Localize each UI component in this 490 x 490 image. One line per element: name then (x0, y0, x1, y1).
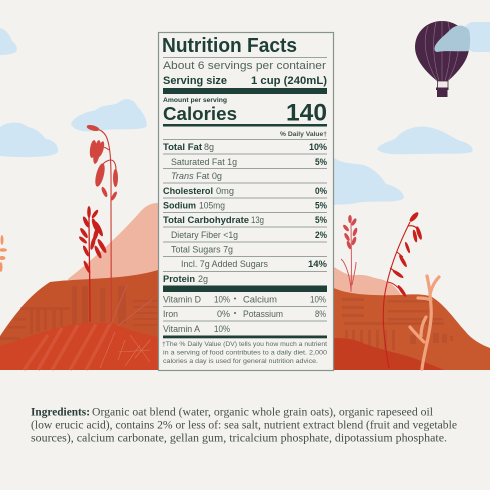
row: vitamin A: 10% (214, 324, 230, 334)
hill: right foreground (334, 338, 444, 370)
cloud: centre left (71, 99, 147, 131)
row: sodium: 5% (315, 200, 327, 210)
plant: orange edge (0, 235, 7, 272)
row: vitamin D and calcium: 10% (214, 294, 230, 304)
row: sodium (163, 200, 327, 210)
footnote divider (163, 336, 327, 338)
row: vitamin A (163, 324, 230, 334)
row: total fat: 10% (309, 142, 327, 152)
ingredients text: Ingredients: (31, 406, 90, 418)
row: total carbohydrate (163, 215, 327, 225)
row: total fat (163, 142, 327, 152)
row: added sugars: Incl. 7g Added Sugars (181, 259, 268, 269)
pink hill: right (334, 267, 402, 296)
thick divider vitamins (163, 286, 327, 292)
plant: peach branch (410, 276, 439, 369)
row: saturated fat: 5% (315, 157, 327, 167)
hill texture: foreground scratches (100, 332, 150, 368)
row: added sugars: 14% (308, 259, 327, 269)
balloon cloud overlay (434, 26, 470, 52)
balloon ropes (438, 81, 448, 88)
hill: left foreground (0, 323, 158, 370)
row: vitamin D and calcium (163, 294, 326, 304)
cloud: lower right (334, 158, 404, 205)
row: dietary fiber: Dietary Fiber <1g (171, 230, 238, 240)
row: cholesterol: 0% (315, 186, 327, 196)
row: iron and potassium: Iron (163, 309, 178, 319)
row: saturated fat (171, 157, 327, 167)
ingredients text (31, 406, 457, 444)
row: iron and potassium: 0% (217, 309, 230, 319)
row: protein (163, 274, 208, 284)
row: vitamin D and calcium: 10% (310, 294, 326, 304)
row: dietary fiber (171, 230, 327, 240)
plant: curved right (383, 211, 423, 368)
hill: right midground (334, 288, 490, 370)
serving size: Serving size (163, 75, 227, 87)
ingredients text: (low erucic acid), contains 2% or less of: sea salt, nutrient extract blend (fruit and vegetable (31, 418, 457, 432)
cloud: upper left (0, 122, 58, 157)
calories: 140 (286, 100, 327, 126)
thick divider (163, 88, 327, 94)
calories: Calories (163, 103, 237, 124)
row: cholesterol: 0mg (216, 186, 234, 196)
hill texture: left (0, 286, 158, 340)
row: cholesterol: Cholesterol (163, 186, 213, 196)
row: total carbohydrate: 5% (315, 215, 327, 225)
plant: small right (341, 215, 358, 292)
hill texture: foreground stripes (24, 324, 110, 370)
servings per container: About 6 servings per container (163, 60, 326, 72)
row: protein: 2g (198, 274, 208, 284)
pink hill: left (68, 203, 158, 280)
hill texture: right (342, 298, 453, 350)
footnote (162, 341, 328, 365)
panel title: Nutrition Facts (162, 35, 297, 57)
row: total sugars: Total Sugars 7g (171, 244, 233, 254)
row: total fat: Total Fat (163, 142, 202, 152)
footnote: †The % Daily Value (DV) tells you how much a nutrient (162, 341, 327, 348)
balloon basket (436, 88, 448, 97)
row: sodium: Sodium (163, 200, 196, 210)
daily value header: % Daily Value† (280, 132, 327, 138)
row: protein: Protein (163, 274, 195, 284)
row: iron and potassium (163, 309, 326, 319)
ingredients text: Organic oat blend (water, organic whole grain oats), organic rapeseed oil (92, 406, 433, 418)
footnote: calories a day is used for general nutrition advice. (163, 358, 318, 365)
row: total carbohydrate: Total Carbohydrate (163, 215, 249, 225)
row: total carbohydrate: 13g (251, 215, 264, 225)
serving size (163, 75, 327, 87)
row: iron and potassium: 8% (315, 309, 326, 319)
hot air balloon (415, 21, 470, 97)
cloud: top left (0, 28, 17, 55)
plant: tall left (86, 124, 118, 323)
row: dietary fiber: 2% (315, 230, 327, 240)
plant: pink grass blades (111, 285, 152, 326)
cloud: mid right (377, 126, 473, 154)
row: vitamin D and calcium: Vitamin D (163, 294, 201, 304)
balloon envelope (415, 21, 469, 81)
balloon seams (425, 21, 459, 81)
nutrition facts panel (158, 32, 334, 370)
serving size: 1 cup (240mL) (251, 75, 327, 87)
row: vitamin D and calcium: Calcium (243, 294, 277, 304)
hill: left midground (0, 270, 158, 370)
cloud: top right (463, 22, 490, 52)
row: vitamin A: Vitamin A (163, 324, 200, 334)
calories (163, 100, 327, 126)
panel background (158, 32, 334, 370)
amount per serving: Amount per serving (163, 98, 227, 104)
row: added sugars (181, 259, 327, 269)
row: sodium: 105mg (199, 200, 225, 210)
row: total fat: 8g (204, 142, 214, 152)
row: cholesterol (163, 186, 327, 196)
plant: short left (78, 206, 108, 322)
row: trans fat: Trans Fat 0g (171, 171, 222, 181)
ingredients text: sources), calcium carbonate, gellan gum, tricalcium phosphate, dipotassium phosphate. (31, 432, 447, 444)
row: saturated fat: Saturated Fat 1g (171, 157, 237, 167)
medium divider (163, 124, 327, 126)
footnote: in a serving of food contributes to a daily diet. 2,000 (163, 350, 328, 356)
row: iron and potassium: Potassium (243, 309, 283, 319)
